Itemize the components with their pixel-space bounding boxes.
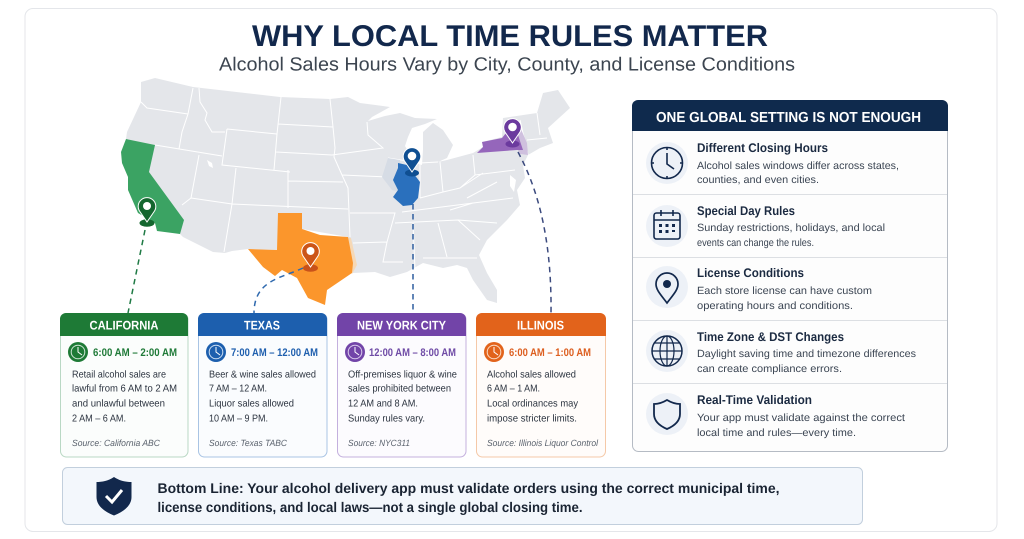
item: real-time validation: [646, 393, 905, 439]
item: real-time validation: Real-Time Validation: [697, 393, 812, 407]
card: Illinois: 6:00 AM – 1:00 AM: [509, 347, 591, 359]
card: Texas: 10 AM – 9 PM.: [209, 414, 268, 424]
item: different closing hours: counties, and even cities.: [697, 174, 819, 186]
connector: New York pin: [518, 152, 551, 313]
item: different closing hours: Different Closing Hours: [697, 141, 828, 155]
icon: shield: [646, 393, 688, 435]
card: Illinois: Local ordinances may: [487, 398, 578, 410]
connector: California: [128, 230, 145, 313]
card: Illinois: Alcohol sales allowed: [487, 370, 576, 380]
card: Illinois: impose stricter limits.: [487, 414, 577, 424]
US map with highlighted states: [121, 78, 570, 313]
item: license conditions: operating hours and conditions.: [697, 300, 853, 312]
state boundaries: [141, 88, 547, 270]
state: Texas: [248, 213, 353, 305]
card: Texas: 7:00 AM – 12:00 AM: [231, 347, 318, 359]
bottom line text: license conditions, and local laws—not a single global closing time.: [158, 499, 582, 515]
card: California: Source: California ABC: [72, 438, 160, 448]
card: California: lawful from 6 AM to 2 AM: [72, 384, 177, 394]
state: Illinois: [393, 163, 420, 206]
card: New York City: Sunday rules vary.: [348, 414, 425, 424]
item: special day rules: Sunday restrictions, holidays, and local: [697, 222, 885, 234]
card: Texas: Liquor sales allowed: [209, 398, 294, 410]
icon: calendar: [646, 205, 688, 247]
card: California: CALIFORNIA: [90, 318, 158, 332]
state: Texas edge: [346, 237, 357, 274]
connector: Texas: [254, 268, 303, 313]
state: California: [121, 139, 184, 234]
item: special day rules: [646, 204, 885, 249]
item: real-time validation: local time and rules—every time.: [697, 427, 856, 439]
item: different closing hours: [646, 141, 899, 186]
card: California: [60, 313, 188, 457]
state: Illinois halo: [382, 158, 400, 192]
item: special day rules: Special Day Rules: [697, 204, 795, 218]
state: New York: [477, 128, 523, 153]
card: New York City: sales prohibited between: [348, 384, 451, 394]
icon: clock: [646, 142, 688, 184]
card: New York City: Source: NYC311: [348, 438, 410, 448]
card: Texas: 7 AM – 12 AM.: [209, 384, 267, 394]
item: time zone and DST changes: Daylight saving time and timezone differences: [697, 348, 916, 360]
icon: location pin: [646, 266, 688, 308]
icon: clock: [484, 342, 504, 362]
icon: clock: [206, 342, 226, 362]
item: real-time validation: Your app must validate against the correct: [697, 412, 905, 424]
card: Texas: TEXAS: [244, 318, 280, 332]
card: New York City: 12 AM and 8 AM.: [348, 398, 418, 410]
card: Illinois: ILLINOIS: [517, 318, 564, 332]
item: license conditions: License Conditions: [697, 266, 804, 280]
bottom line text: Bottom Line: Your alcohol delivery app must validate orders using the correct municipal time,: [158, 480, 780, 496]
map: contiguous United States: [126, 78, 570, 303]
card: New York City: NEW YORK CITY: [357, 318, 447, 332]
card: New York City: Off-premises liquor & wine: [348, 370, 457, 380]
card: Illinois: Source: Illinois Liquor Control: [487, 438, 599, 448]
pin: California: [138, 198, 156, 227]
item: different closing hours: Alcohol sales windows differ across states,: [697, 160, 899, 172]
card: New York City: [337, 313, 466, 457]
item: special day rules: events can change the rules.: [697, 237, 814, 249]
title: WHY LOCAL TIME RULES MATTER: [252, 20, 768, 53]
card: New York City: 12:00 AM – 8:00 AM: [369, 347, 456, 359]
card: Illinois: [476, 313, 606, 457]
panel heading: ONE GLOBAL SETTING IS NOT ENOUGH: [656, 110, 921, 126]
item: time zone and DST changes: Time Zone & DST Changes: [697, 330, 844, 344]
item: time zone and DST changes: [646, 330, 916, 375]
card: California: 2 AM – 6 AM.: [72, 414, 126, 424]
card: California: 6:00 AM – 2:00 AM: [93, 347, 177, 359]
icon: clock: [68, 342, 88, 362]
pin: New York: [504, 119, 521, 148]
callout: bottom line: [62, 468, 862, 524]
pin: Illinois: [403, 148, 421, 176]
pin: Texas: [302, 243, 319, 272]
item: license conditions: [646, 266, 872, 312]
subtitle: Alcohol Sales Hours Vary by City, County, and License Conditions: [219, 54, 795, 76]
item: time zone and DST changes: can create compliance errors.: [697, 363, 842, 375]
icon: clock: [345, 342, 365, 362]
card: Texas: Source: Texas TABC: [209, 438, 287, 448]
lakes and bays: [207, 160, 516, 192]
card: Illinois: 6 AM – 1 AM.: [487, 384, 540, 394]
card: Texas: [198, 313, 327, 457]
card: California: Retail alcohol sales are: [72, 370, 166, 380]
item: license conditions: Each store license can have custom: [697, 285, 872, 297]
connector: Illinois pin: [412, 204, 414, 313]
state: New England tint: [505, 120, 528, 155]
card: California: and unlawful between: [72, 398, 165, 410]
card: Texas: Beer & wine sales allowed: [209, 370, 316, 380]
icon: globe: [646, 330, 688, 372]
bottom line text: [158, 480, 780, 515]
panel: one global setting is not enough: [632, 100, 948, 452]
icon: shield check: [96, 477, 132, 516]
